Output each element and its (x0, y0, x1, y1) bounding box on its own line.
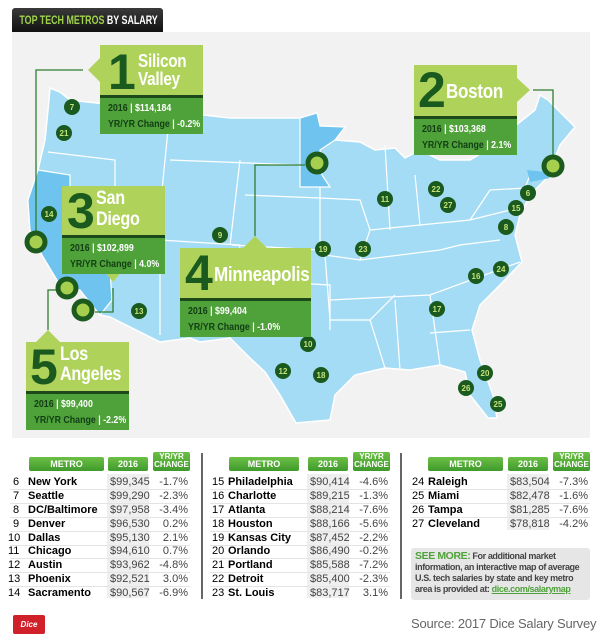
callout 5 (26, 339, 129, 430)
table 3: Cleveland (428, 518, 480, 530)
table 2: 19 (212, 532, 224, 544)
map panel (12, 32, 590, 438)
table 3: $82,478 (510, 490, 550, 502)
table 1: $95,130 (110, 532, 150, 544)
table 2: 22 (212, 573, 224, 585)
table 3: METRO (449, 459, 482, 469)
table 2: -7.6% (359, 504, 388, 516)
table 1: YR/YR (159, 452, 184, 461)
numbered markers: 23 (359, 245, 368, 254)
numbered markers: 16 (472, 272, 481, 281)
table 2: Houston (228, 518, 273, 530)
table 2: 20 (212, 545, 224, 557)
table 3: -4.2% (559, 518, 588, 530)
highlighted states (28, 170, 112, 315)
table 1: CHANGE (154, 460, 189, 469)
table 2: YR/YR (359, 452, 384, 461)
table 1: New York (28, 476, 77, 488)
numbered markers: 22 (432, 185, 441, 194)
callout 2: 2 (418, 62, 446, 118)
callout 1: Valley (138, 69, 180, 89)
numbered markers: 19 (319, 245, 328, 254)
table 1: 14 (8, 587, 20, 599)
numbered markers: 15 (512, 204, 521, 213)
table 1: 0.7% (163, 545, 188, 557)
numbered markers (41, 99, 536, 412)
table 2: 2016 (318, 459, 338, 469)
table 1: 11 (8, 545, 19, 557)
callout 3 (62, 183, 165, 274)
callout 4: YR/YR Change | -1.0% (188, 321, 280, 333)
table 2: 15 (212, 476, 224, 488)
table 1: $96,530 (110, 518, 150, 530)
table 2: -5.6% (359, 518, 388, 530)
table 1: DC/Baltimore (28, 504, 98, 516)
table 1: 2016 (118, 459, 138, 469)
table 3: $78,818 (510, 518, 550, 530)
table 1: -2.3% (159, 490, 188, 502)
callout 2: YR/YR Change | 2.1% (422, 139, 511, 151)
table 3: 25 (412, 490, 424, 502)
source: Source: 2017 Dice Salary Survey (411, 616, 596, 631)
table 2: -1.3% (359, 490, 388, 502)
table 3: 24 (412, 476, 424, 488)
table 1: 3.0% (163, 573, 188, 585)
see more box: SEE MORE: For additional market information, an interactive map of average U.S. tech salaries by state and key metro area is provided at: dice.com/salarymap (415, 550, 579, 594)
callout 5: Angeles (60, 364, 121, 385)
table 1: $97,958 (110, 504, 150, 516)
table 2 (210, 452, 390, 599)
dice logo: Dice (21, 620, 37, 629)
table 1: Austin (28, 559, 62, 571)
pointers (36, 58, 530, 342)
numbered markers: 14 (45, 210, 54, 219)
numbered markers: 10 (304, 340, 313, 349)
table 3: YR/YR (559, 452, 584, 461)
callout 4: Minneapolis (214, 264, 309, 286)
numbered markers: 13 (135, 307, 144, 316)
table 3: -1.6% (559, 490, 588, 502)
table 2: 21 (212, 559, 224, 571)
US map (24, 58, 576, 424)
table 2: $88,166 (310, 518, 350, 530)
numbered markers: 6 (526, 189, 531, 198)
numbered markers: 17 (433, 305, 442, 314)
title bar (12, 8, 163, 32)
table 2: 16 (212, 490, 224, 502)
table 2: -0.2% (359, 545, 388, 557)
table 1: 10 (8, 532, 20, 544)
table 3: CHANGE (554, 460, 589, 469)
numbered markers: 20 (481, 369, 490, 378)
callout 1: 1 (108, 44, 136, 100)
table 1: Seattle (28, 490, 64, 502)
table 3: $81,285 (510, 504, 550, 516)
table 2: Portland (228, 559, 273, 571)
callout 4 (180, 245, 311, 337)
callout 1: YR/YR Change | -0.2% (108, 118, 200, 130)
numbered markers: 18 (317, 371, 326, 380)
callout 3: 3 (67, 183, 95, 239)
callout 4: 4 (185, 245, 213, 301)
table 3: $83,504 (510, 476, 550, 488)
table 1: $94,610 (110, 545, 150, 557)
table 1: Dallas (28, 532, 60, 544)
table 1: METRO (50, 459, 83, 469)
table 1: 12 (8, 559, 20, 571)
table 1: 13 (8, 573, 20, 585)
table 1: -4.8% (159, 559, 188, 571)
table 1: 7 (13, 490, 19, 502)
table 2: Kansas City (228, 532, 291, 544)
table 2: 23 (212, 587, 224, 599)
callout 5: YR/YR Change | -2.2% (34, 414, 126, 426)
table 2: Detroit (228, 573, 263, 585)
table 1 (8, 452, 190, 599)
numbered markers: 27 (444, 201, 453, 210)
callout 3: San (96, 188, 125, 209)
numbered markers: 24 (497, 265, 506, 274)
callout 5: 5 (30, 339, 58, 395)
table 2: 17 (212, 504, 224, 516)
table 3: -7.3% (559, 476, 588, 488)
table 2: -2.3% (359, 573, 388, 585)
table 3: 26 (412, 504, 424, 516)
table 3: 27 (412, 518, 424, 530)
numbered markers: 11 (381, 195, 390, 204)
numbered markers: 8 (504, 223, 509, 232)
title bar: TOP TECH METROS BY SALARY (19, 13, 158, 27)
table 2: 18 (212, 518, 224, 530)
table 1: 6 (13, 476, 19, 488)
table 1: 0.2% (163, 518, 188, 530)
table 1: 2.1% (163, 532, 188, 544)
callout 5: 2016 | $99,400 (34, 398, 93, 410)
table 2: $90,414 (310, 476, 350, 488)
table 1: Phoenix (28, 573, 71, 585)
table 1: 9 (13, 518, 19, 530)
connector lines (36, 70, 553, 330)
callout 2: Boston (446, 81, 503, 103)
numbered markers: 12 (279, 367, 288, 376)
table 2: Philadelphia (228, 476, 293, 488)
callout 1: Silicon (138, 51, 186, 71)
table 3: -7.6% (559, 504, 588, 516)
table 1: Chicago (28, 545, 71, 557)
callout 1 (100, 44, 203, 134)
table 1: Denver (28, 518, 65, 530)
table 2: -4.6% (359, 476, 388, 488)
table 3: Raleigh (428, 476, 468, 488)
numbered markers: 7 (70, 103, 75, 112)
table 2: Charlotte (228, 490, 276, 502)
table 2: $88,214 (310, 504, 350, 516)
numbered markers: 26 (462, 384, 471, 393)
table 2: $89,215 (310, 490, 350, 502)
table 2: $83,717 (310, 587, 350, 599)
callout 1: 2016 | $114,184 (108, 102, 171, 114)
table 3: Miami (428, 490, 459, 502)
callout 5: Los (60, 344, 88, 365)
callout 3: YR/YR Change | 4.0% (70, 258, 159, 270)
callout 2 (414, 62, 517, 155)
table 1: $93,962 (110, 559, 150, 571)
table 2: 3.1% (363, 587, 388, 599)
callout 4: 2016 | $99,404 (188, 305, 247, 317)
callout 2: 2016 | $103,368 (422, 123, 486, 135)
table 1: -1.7% (159, 476, 188, 488)
table 1: $92,521 (110, 573, 150, 585)
table 1: -3.4% (159, 504, 188, 516)
dice logo (13, 615, 45, 634)
table 2: $87,452 (310, 532, 350, 544)
table 2: Atlanta (228, 504, 265, 516)
table 2: St. Louis (228, 587, 274, 599)
table 2: -2.2% (359, 532, 388, 544)
table 2: $86,490 (310, 545, 350, 557)
table 2: $85,400 (310, 573, 350, 585)
table 1: $99,290 (110, 490, 150, 502)
table 1: -6.9% (159, 587, 188, 599)
callout 3: 2016 | $102,899 (70, 242, 134, 254)
table 2: Orlando (228, 545, 270, 557)
table 2: CHANGE (354, 460, 389, 469)
table 3: 2016 (518, 459, 538, 469)
callout 3: Diego (96, 209, 140, 230)
table 1: $99,345 (110, 476, 150, 488)
table 1: Sacramento (28, 587, 91, 599)
numbered markers: 25 (494, 400, 503, 409)
table 3: Tampa (428, 504, 463, 516)
table 2: -7.2% (359, 559, 388, 571)
table 1: 8 (13, 504, 19, 516)
table 2: $85,588 (310, 559, 350, 571)
numbered markers: 9 (218, 231, 223, 240)
numbered markers: 21 (60, 129, 69, 138)
big city markers (27, 154, 562, 319)
table 1: $90,567 (110, 587, 150, 599)
table 3 (410, 452, 590, 530)
table 2: METRO (248, 459, 280, 469)
